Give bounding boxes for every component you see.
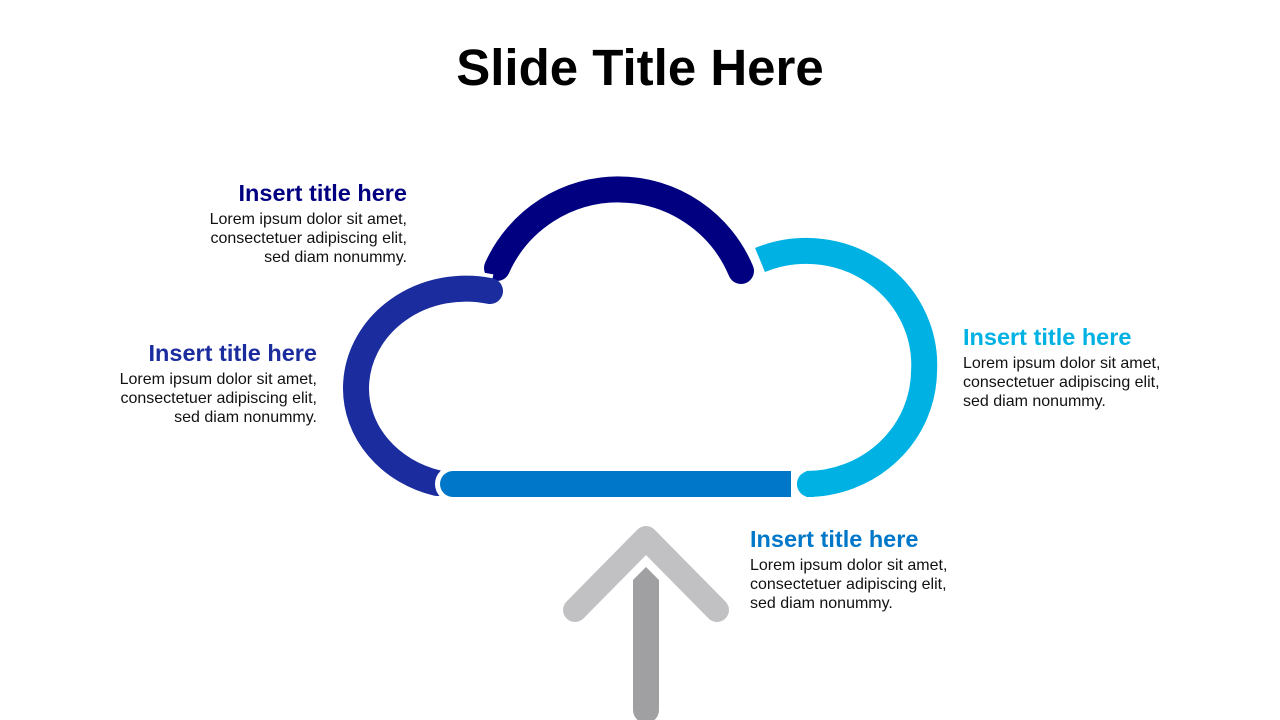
text: bottom: sed diam nonummy. — [750, 595, 893, 612]
icon: upload arrow — [575, 538, 717, 720]
text: top-left: sed diam nonummy. — [264, 249, 407, 266]
text: bottom: consectetuer adipiscing elit, — [750, 576, 947, 593]
text: bottom: Lorem ipsum dolor sit amet, — [750, 557, 947, 574]
cloud: top arc — [497, 189, 741, 271]
text: top-left — [210, 180, 407, 266]
title: Slide Title Here — [456, 39, 824, 96]
text: left: sed diam nonummy. — [174, 409, 317, 426]
text: right: sed diam nonummy. — [963, 393, 1106, 410]
text: bottom: Insert title here — [750, 526, 918, 552]
text: right: Insert title here — [963, 324, 1131, 350]
cloud: left arc — [356, 289, 490, 483]
text: right: consectetuer adipiscing elit, — [963, 374, 1160, 391]
cloud: right arc — [760, 251, 924, 484]
text: left: consectetuer adipiscing elit, — [120, 390, 317, 407]
text: left: Lorem ipsum dolor sit amet, — [120, 371, 317, 388]
text: top-left: Lorem ipsum dolor sit amet, — [210, 211, 407, 228]
text: top-left: consectetuer adipiscing elit, — [210, 230, 407, 247]
cloud: bottom bar — [438, 469, 823, 499]
text: bottom — [750, 526, 947, 612]
text: left — [120, 340, 317, 426]
text: right: Lorem ipsum dolor sit amet, — [963, 355, 1160, 372]
text: right — [963, 324, 1160, 410]
text: left: Insert title here — [149, 340, 317, 366]
text: top-left: Insert title here — [239, 180, 407, 206]
